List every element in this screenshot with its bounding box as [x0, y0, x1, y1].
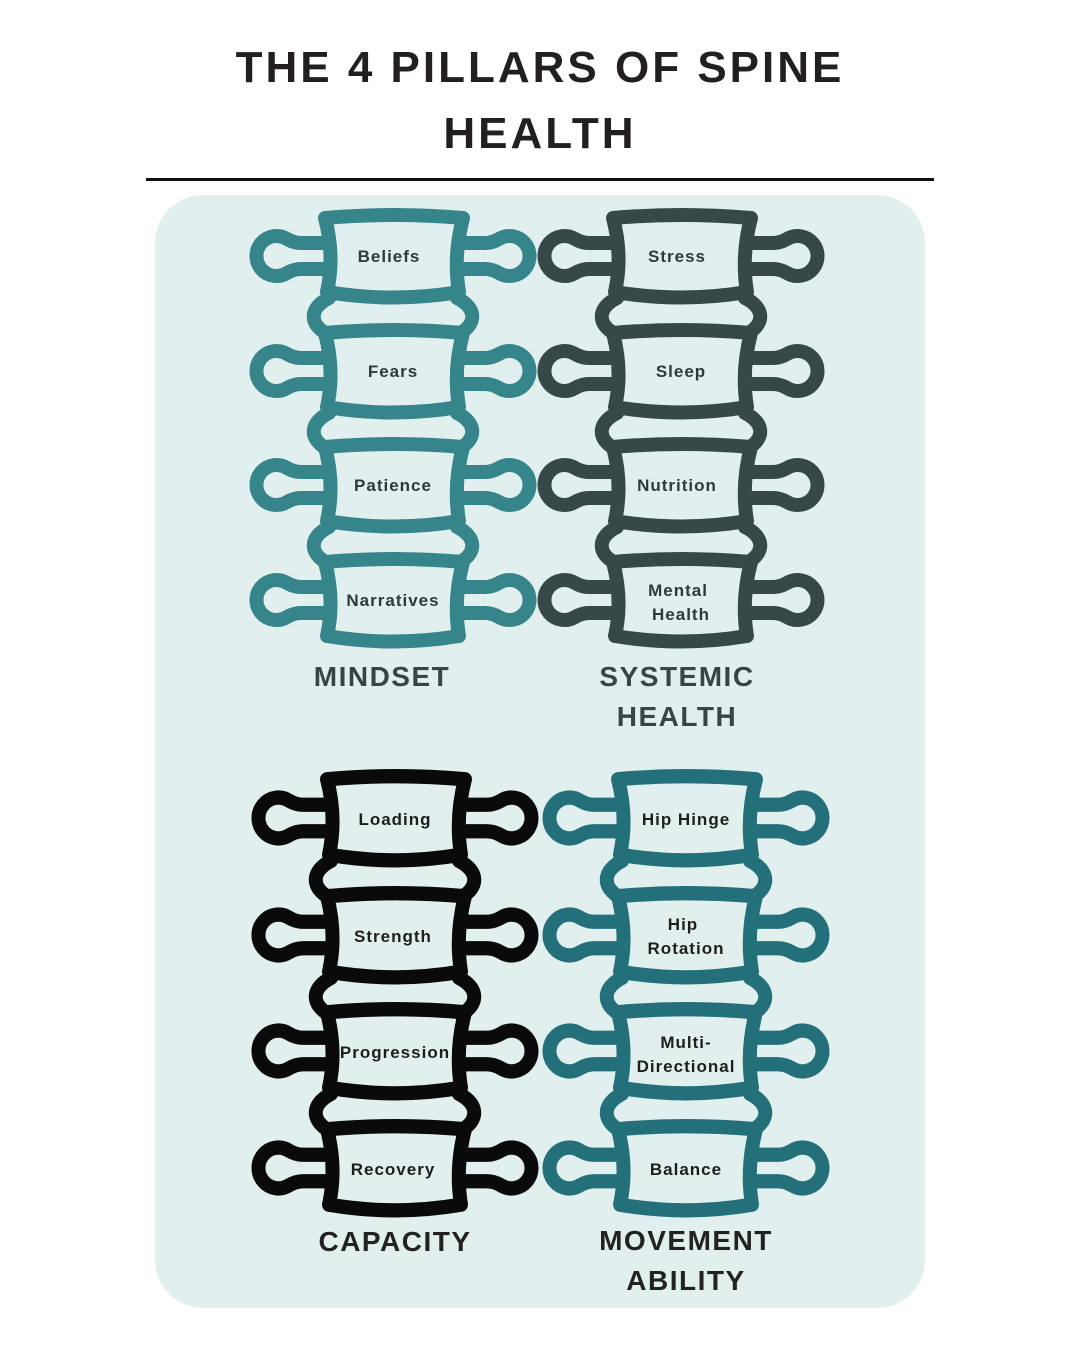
pillar: systemic health: SYSTEMIC	[599, 661, 755, 692]
pillar: systemic health: Sleep	[656, 362, 706, 381]
pillar: systemic health: Health	[652, 605, 710, 624]
pillar: mindset: MINDSET	[314, 661, 450, 692]
pillar: capacity: Strength	[354, 927, 432, 946]
pillar: movement ability: Balance	[650, 1160, 722, 1179]
pillar: capacity	[258, 776, 532, 1257]
pillar: mindset: Beliefs	[358, 247, 420, 266]
pillar: mindset: Narratives	[346, 591, 440, 610]
pillar: movement ability: ABILITY	[626, 1265, 746, 1296]
title: HEALTH	[443, 109, 637, 158]
pillar: capacity: Progression	[340, 1043, 450, 1062]
pillar: movement ability: Directional	[637, 1057, 735, 1076]
title	[236, 43, 844, 158]
pillar: systemic health: Stress	[648, 247, 706, 266]
pillar: systemic health: Nutrition	[637, 476, 717, 495]
pillar: movement ability: MOVEMENT	[599, 1225, 773, 1256]
pillar: capacity: Loading	[358, 810, 432, 829]
panel background	[155, 195, 925, 1308]
pillar: systemic health: HEALTH	[617, 701, 737, 732]
pillar: systemic health	[544, 215, 818, 732]
pillar: mindset: Patience	[354, 476, 432, 495]
pillar: systemic health: Mental	[648, 581, 708, 600]
pillar: movement ability: Rotation	[648, 939, 724, 958]
pillar: capacity: Recovery	[351, 1160, 435, 1179]
pillar: movement ability: Hip Hinge	[642, 810, 730, 829]
pillar: mindset: Fears	[368, 362, 418, 381]
title underline	[146, 178, 934, 181]
pillar: mindset	[256, 215, 530, 692]
pillar: movement ability	[549, 776, 823, 1296]
title: THE 4 PILLARS OF SPINE	[236, 43, 844, 92]
pillar: movement ability: Multi-	[660, 1033, 712, 1052]
pillar: capacity: CAPACITY	[318, 1226, 472, 1257]
pillar: movement ability: Hip	[668, 915, 698, 934]
